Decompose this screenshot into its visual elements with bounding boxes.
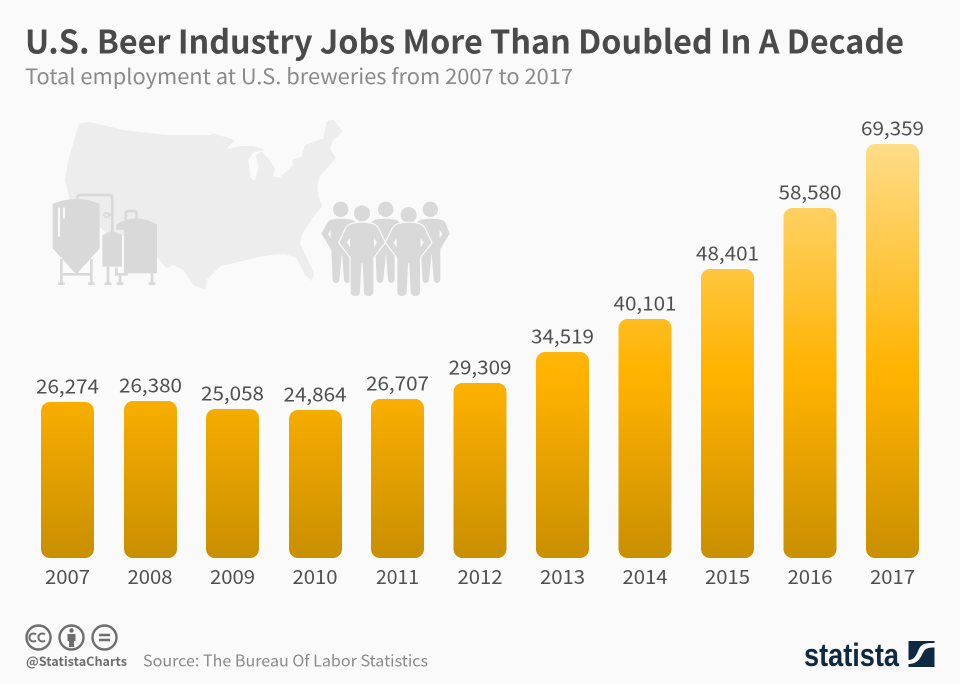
source: Source: The Bureau Of Labor Statistics [143, 648, 428, 672]
bar 2012: 2012 [458, 561, 502, 590]
bar 2016 [778, 176, 842, 590]
bar 2013: 34,519 [531, 320, 594, 350]
bar 2007: 26,274 [36, 370, 99, 400]
icon: statista mark [908, 641, 934, 667]
bar 2012 [448, 352, 512, 590]
bar 2009: 25,058 [201, 378, 264, 406]
bar 2007: 2007 [45, 561, 90, 590]
bar 2009 [201, 378, 264, 590]
bar 2016: 58,580 [778, 176, 842, 206]
back worker left [321, 202, 360, 283]
bar 2015 [696, 238, 759, 590]
bar 2010 [284, 378, 347, 590]
back worker right [411, 202, 450, 283]
back worker centre [365, 202, 404, 283]
bar 2017: 2017 [870, 561, 915, 590]
bar 2012: 29,309 [448, 352, 512, 380]
bar 2008 [119, 370, 182, 590]
bar 2009: 2009 [210, 561, 255, 590]
front worker left [339, 205, 385, 296]
bar 2008: 26,380 [119, 370, 182, 398]
bar 2007 [36, 370, 99, 590]
bar 2011 [366, 368, 429, 590]
bar 2008: 2008 [128, 561, 172, 590]
bar 2014 [614, 288, 676, 590]
bar 2015: 2015 [705, 561, 750, 590]
bar 2010: 24,864 [284, 378, 347, 408]
bar 2014: 2014 [622, 561, 668, 590]
bar 2013 [531, 320, 594, 590]
bar 2017 [861, 112, 924, 590]
bar 2011: 2011 [376, 561, 419, 590]
bar 2013: 2013 [540, 561, 585, 590]
bar 2015: 48,401 [696, 238, 759, 266]
bar 2010: 2010 [292, 561, 338, 590]
title: U.S. Beer Industry Jobs More Than Doubled In A Decade [25, 16, 904, 64]
icon: map of the United States [65, 119, 343, 290]
icon: creative commons licence [26, 626, 116, 650]
statista logo: statista [804, 637, 899, 673]
bar 2014: 40,101 [614, 288, 676, 316]
front worker right [386, 207, 431, 296]
bar 2017: 69,359 [861, 112, 924, 142]
bar 2016: 2016 [788, 561, 832, 590]
bar chart [36, 112, 924, 590]
bar 2011: 26,707 [366, 368, 429, 396]
handle: @StatistaCharts [26, 651, 127, 670]
icon: brewery tanks [53, 195, 157, 285]
subtitle: Total employment at U.S. breweries from 2007 to 2017 [25, 61, 573, 91]
icon: group of workers [321, 202, 450, 296]
